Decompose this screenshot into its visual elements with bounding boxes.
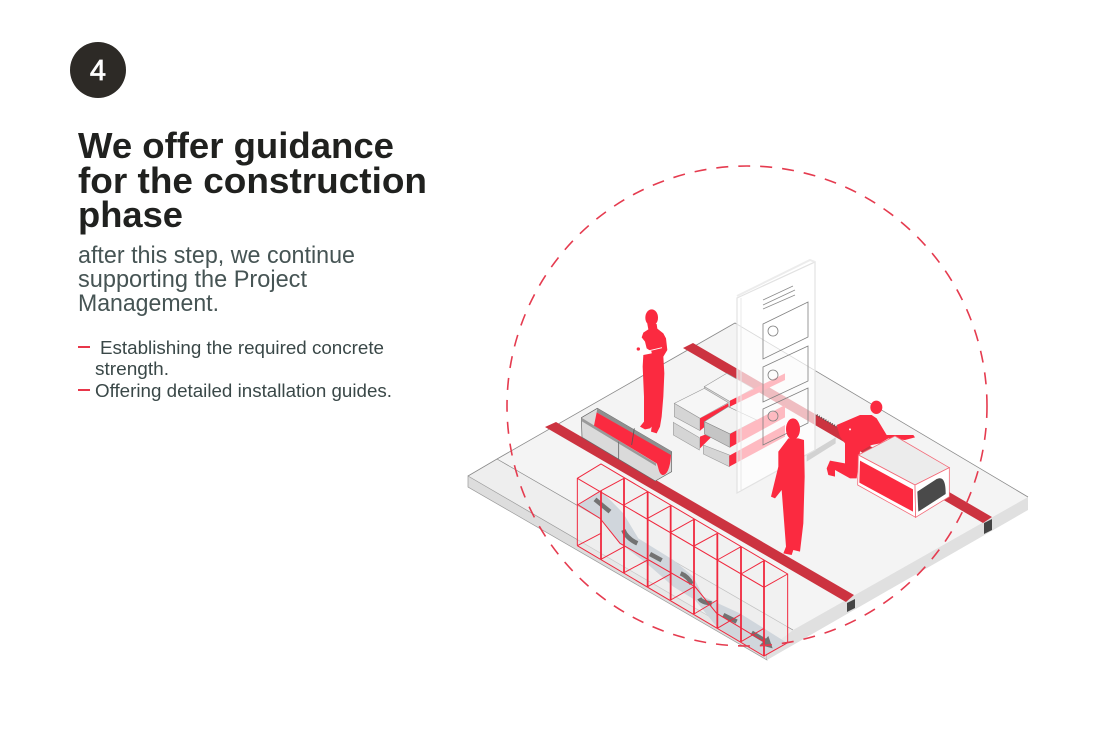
back red service strip (683, 343, 992, 523)
subtitle (78, 242, 355, 317)
subtitle: supporting the Project (78, 266, 307, 293)
front upper block (704, 405, 785, 447)
step number badge: 4 (90, 55, 106, 87)
drainage channel elements (581, 408, 672, 481)
person standing in the centre (771, 418, 805, 555)
bullet list: Offering detailed installation guides. (95, 381, 392, 401)
title (78, 125, 427, 235)
lower left block (673, 422, 718, 450)
isometric illustration (468, 166, 1028, 660)
document cards (763, 302, 808, 445)
back block (704, 373, 785, 407)
front lower block (703, 425, 785, 467)
title: We offer guidance (78, 125, 394, 166)
strip end caps (847, 519, 992, 612)
grey base with ticks (807, 415, 837, 462)
title: for the construction (78, 160, 427, 201)
document text lines (763, 286, 795, 309)
bay background (577, 464, 788, 656)
subtitle: after this step, we continue (78, 242, 355, 269)
step number badge (70, 42, 126, 98)
red frame bay grid with flow path (577, 464, 788, 656)
title: phase (78, 194, 183, 235)
water flow surface (578, 491, 787, 655)
front red service strip (545, 422, 854, 602)
dashed red circle (507, 166, 987, 646)
precast box element (858, 436, 949, 517)
flow arrows (595, 499, 773, 648)
subtitle: Management. (78, 290, 219, 317)
upper left block (674, 388, 728, 431)
lower concrete slab (468, 323, 1028, 660)
person standing with tablet (637, 309, 667, 433)
translucent instruction panel (737, 260, 815, 493)
bold frame uprights (601, 478, 764, 656)
bullet list: strength. (95, 359, 169, 379)
red wire frames (577, 464, 788, 656)
stacked concrete blocks (673, 373, 837, 467)
bullet list (78, 338, 392, 401)
bullet list: Establishing the required concrete (100, 338, 384, 358)
person kneeling at the box (827, 401, 915, 478)
